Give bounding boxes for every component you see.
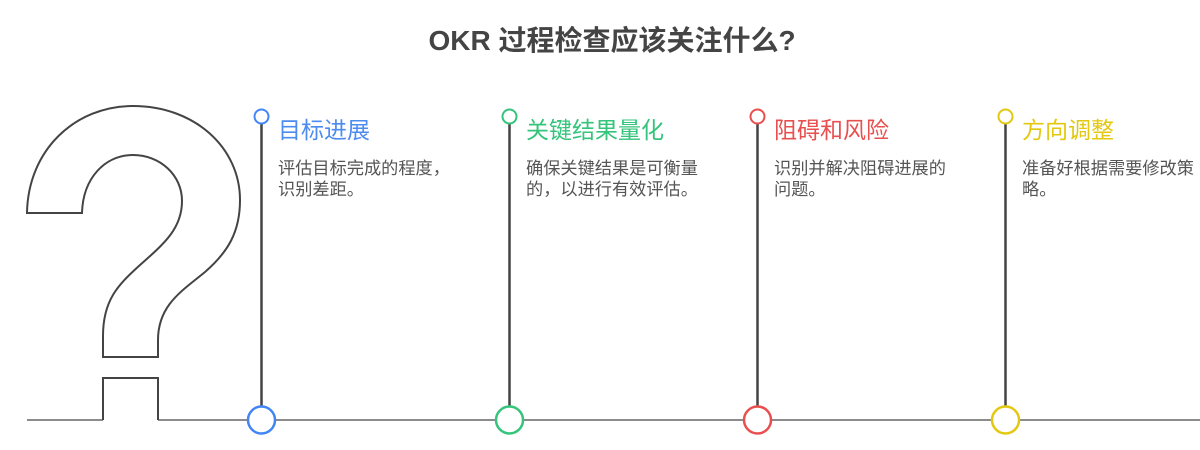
- timeline item: 阻碍和风险: 问题。: [774, 179, 826, 199]
- timeline item: 目标进展: 识别差距。: [278, 179, 364, 199]
- timeline item: 关键结果量化: 确保关键结果是可衡量: [526, 158, 698, 178]
- timeline item: 方向调整: [992, 110, 1194, 434]
- title: OKR 过程检查应该关注什么?: [428, 25, 796, 56]
- timeline item: 关键结果量化: [496, 110, 698, 434]
- timeline item: 目标进展: 目标进展: [278, 117, 370, 143]
- timeline item: 目标进展: 评估目标完成的程度，: [278, 158, 450, 178]
- timeline item: 方向调整: 略。: [1022, 179, 1056, 199]
- timeline item: 阻碍和风险: 阻碍和风险: [774, 117, 889, 143]
- timeline item: 关键结果量化: 的，以进行有效评估。: [526, 179, 698, 199]
- timeline item: 阻碍和风险: 识别并解决阻碍进展的: [774, 158, 946, 178]
- timeline item: 关键结果量化: 关键结果量化: [526, 117, 664, 143]
- timeline item: 方向调整: 方向调整: [1022, 117, 1114, 143]
- icon: question mark: [27, 106, 240, 420]
- timeline item: 目标进展: [248, 110, 450, 434]
- baseline axis: [27, 419, 1200, 421]
- timeline item: 阻碍和风险: [744, 110, 946, 434]
- timeline item: 方向调整: 准备好根据需要修改策: [1022, 158, 1194, 178]
